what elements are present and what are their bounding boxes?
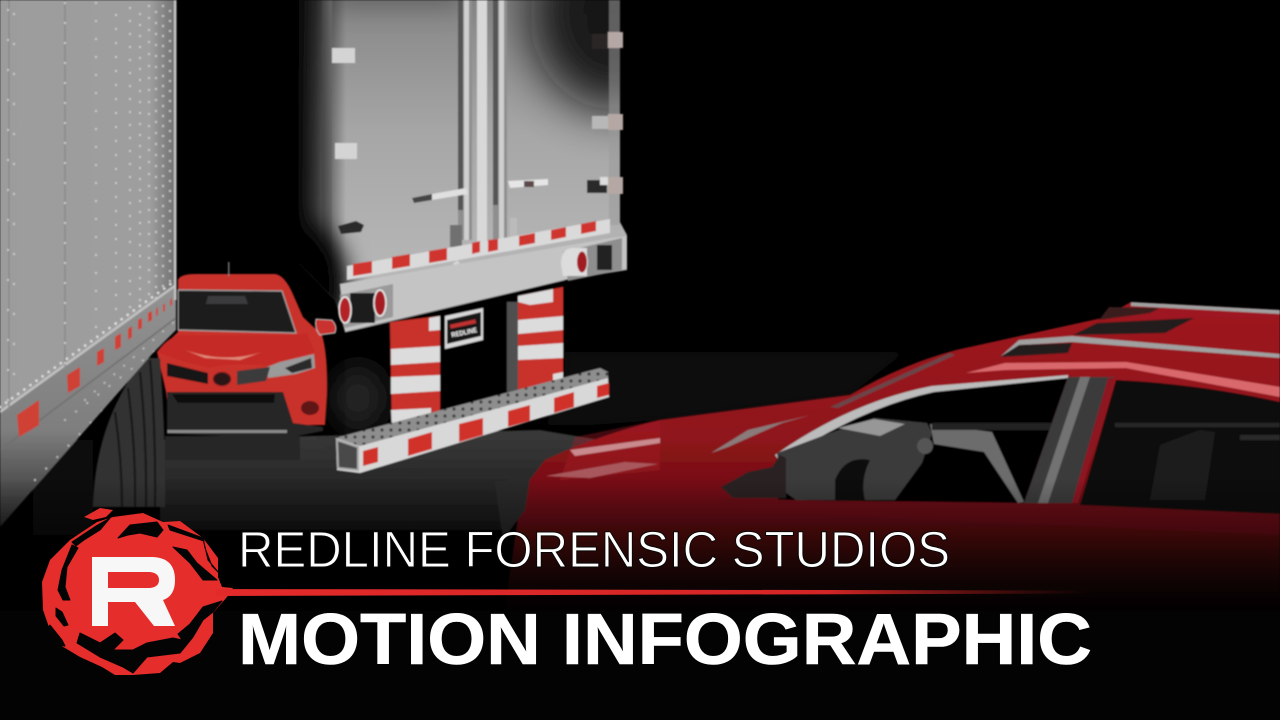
- rear rail: [340, 236, 627, 332]
- car dashboard: [777, 418, 932, 500]
- suv lower bumper: [167, 392, 323, 438]
- underride black panel: [345, 280, 565, 440]
- bottom band: [0, 611, 1280, 720]
- door marker strip: [347, 219, 610, 280]
- rail rivet row: [0, 280, 176, 407]
- suv fog lamp: [301, 401, 319, 415]
- logo: [42, 508, 233, 675]
- right guard post: [518, 287, 563, 390]
- logo letter R: [92, 557, 175, 626]
- suv ground shadow: [165, 436, 300, 460]
- license plate: REDLINE: [451, 327, 478, 339]
- logo black slashes: [48, 518, 222, 673]
- trailer red reflectors: [17, 298, 172, 437]
- door belt line: [720, 498, 1280, 535]
- car mirror: [721, 455, 786, 498]
- car body: [500, 302, 1280, 640]
- rear impact guard bumper: [335, 368, 609, 473]
- left tail lights: [339, 284, 393, 328]
- left guard post: [390, 316, 440, 428]
- bottom fade overlay: [0, 480, 1280, 612]
- crumpled hood: [546, 420, 660, 480]
- underride dim glow: [332, 368, 384, 428]
- suv windshield: [178, 290, 296, 333]
- door shading: [295, 0, 621, 334]
- title line two: MOTION INFOGRAPHIC: [238, 600, 1092, 680]
- suv hood: [157, 333, 315, 368]
- license plate: [445, 308, 483, 349]
- gray support bar: [507, 302, 518, 392]
- side window: [778, 377, 1068, 503]
- right tail lights: [561, 238, 622, 281]
- trailer tires: [33, 358, 165, 535]
- door hinges and handles: [332, 32, 623, 234]
- door lock rods: [447, 0, 517, 286]
- suv grille: [167, 363, 270, 386]
- ground and road: [160, 352, 905, 530]
- roof rail rear: [1131, 302, 1280, 314]
- large red car foreground: [495, 302, 1280, 640]
- windshield reflection: [830, 353, 955, 408]
- title line one: REDLINE FORENSIC STUDIOS: [238, 521, 950, 578]
- trailer rivets: [8, 3, 170, 420]
- rear trailer door: [298, 0, 628, 334]
- b pillar: [1024, 377, 1114, 503]
- car roof highlight: [966, 362, 1280, 397]
- suv body: [157, 274, 327, 425]
- lower band rivets: [35, 320, 176, 480]
- left trailer side: [0, 0, 176, 527]
- distant red suv: [157, 262, 336, 460]
- door frame right: [609, 0, 620, 225]
- suv mirror: [316, 319, 336, 335]
- suv headlight: [267, 354, 315, 378]
- roof rail front: [1000, 336, 1280, 358]
- divider line: [216, 589, 1090, 596]
- rear window: [1080, 380, 1280, 514]
- logo red burst: [42, 513, 233, 675]
- crumpled front corner: [495, 478, 530, 540]
- logo top fragment: [84, 508, 113, 520]
